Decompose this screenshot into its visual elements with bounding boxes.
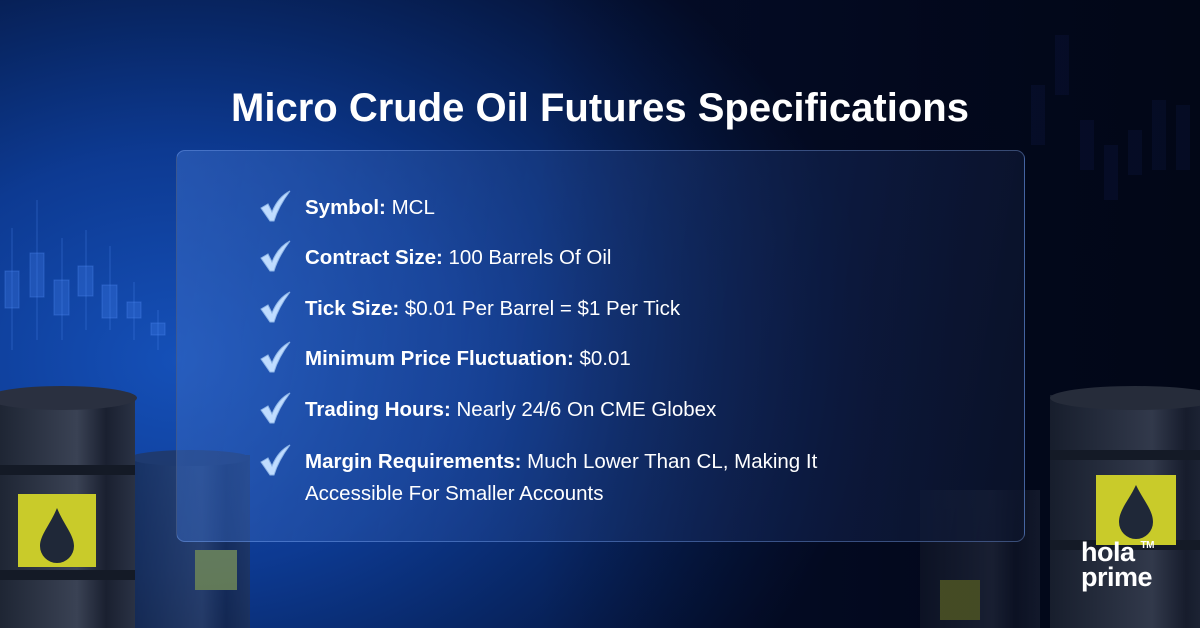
text: Symbol: MCL	[305, 196, 435, 219]
item: contract size	[260, 240, 611, 272]
item: symbol	[260, 190, 435, 222]
item: minimum price fluctuation	[260, 342, 631, 372]
text: Contract Size: 100 Barrels Of Oil	[305, 246, 611, 269]
logo: hola prime: hola TM	[1081, 537, 1154, 567]
text: Accessible For Smaller Accounts	[305, 482, 604, 505]
item: margin requirements	[260, 444, 818, 505]
logo: hola prime: prime	[1081, 562, 1152, 592]
text: Margin Requirements: Much Lower Than CL, Making It	[305, 450, 817, 473]
barrels right	[920, 386, 1200, 628]
panel: specifications	[176, 150, 1025, 542]
title: Micro Crude Oil Futures Specifications	[231, 86, 969, 130]
item: trading hours	[260, 392, 716, 424]
text: Minimum Price Fluctuation: $0.01	[305, 347, 631, 370]
text: Tick Size: $0.01 Per Barrel = $1 Per Tick	[305, 297, 680, 320]
barrels left	[0, 386, 250, 628]
item: tick size	[260, 292, 680, 322]
logo: hola prime	[1081, 537, 1154, 592]
text: Trading Hours: Nearly 24/6 On CME Globex	[305, 398, 716, 421]
